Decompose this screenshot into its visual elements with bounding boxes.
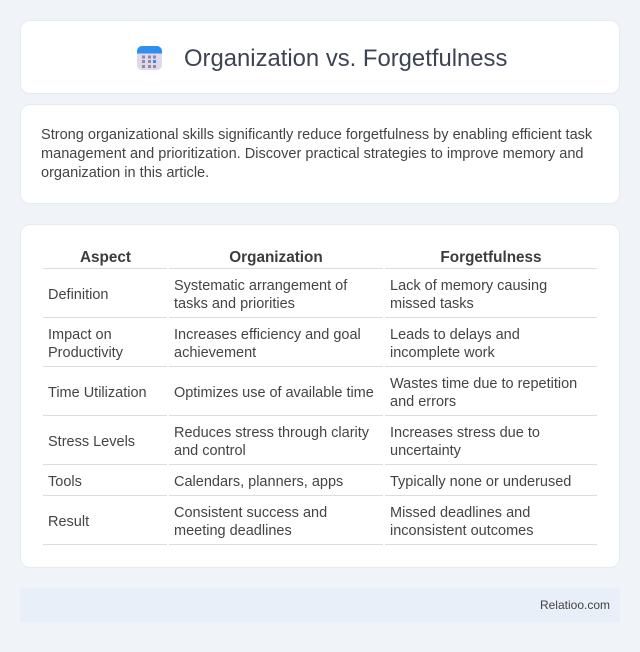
table row: Impact on Productivity xyxy=(48,327,520,361)
table row: Definition xyxy=(48,278,547,312)
table row: Result: Consistent success and xyxy=(174,505,327,521)
table row: Time Utilization: Time Utilization xyxy=(48,385,147,401)
table row: Stress Levels: Increases stress due to xyxy=(390,425,540,441)
table row: Time Utilization: and errors xyxy=(390,394,456,410)
table row: Stress Levels: Reduces stress through clarity xyxy=(174,425,369,441)
text block: introduction xyxy=(41,127,592,181)
table row: Definition: Lack of memory causing xyxy=(390,278,547,294)
icon: calendar xyxy=(137,46,162,70)
table row: Impact on Productivity: Productivity xyxy=(48,345,123,361)
panel: introduction card xyxy=(20,104,620,204)
table row: Impact on Productivity: incomplete work xyxy=(390,345,495,361)
table row: Tools: Typically none or underused xyxy=(390,474,571,490)
table row: Result xyxy=(48,505,533,539)
table row: Impact on Productivity: Impact on xyxy=(48,327,112,343)
table row: Definition: Definition xyxy=(48,287,108,303)
table row: Result: Missed deadlines and xyxy=(390,505,530,521)
text block: introduction: Strong organizational skills significantly reduce forgetfulness by enabling efficient task xyxy=(41,127,592,143)
text block: introduction: management and prioritization. Discover practical strategies to improve memory and xyxy=(41,146,584,162)
table row: Impact on Productivity: Leads to delays and xyxy=(390,327,520,343)
table row: Impact on Productivity: Increases efficiency and goal xyxy=(174,327,361,343)
table row: Stress Levels: and control xyxy=(174,443,246,459)
table row: Tools: Calendars, planners, apps xyxy=(174,474,343,490)
panel: comparison table card xyxy=(20,224,620,568)
table row: Tools xyxy=(48,474,571,490)
table row: Stress Levels: Stress Levels xyxy=(48,434,135,450)
table row: Definition: Systematic arrangement of xyxy=(174,278,347,294)
heading: Forgetfulness column: Forgetfulness xyxy=(440,249,542,266)
table row: Time Utilization: Optimizes use of available time xyxy=(174,385,374,401)
panel: header card xyxy=(20,20,620,94)
table row: Result: inconsistent outcomes xyxy=(390,523,533,539)
table row: Definition: tasks and priorities xyxy=(174,296,295,312)
footer bar xyxy=(20,588,620,622)
heading: Organization column: Organization xyxy=(229,249,323,266)
text block: introduction: organization in this article. xyxy=(41,165,209,181)
title: Organization vs. Forgetfulness xyxy=(184,45,507,72)
table row: Time Utilization: Wastes time due to repetition xyxy=(390,376,577,392)
table row: Result: Result xyxy=(48,514,89,530)
heading: Aspect column: Aspect xyxy=(80,249,131,266)
table row: Definition: missed tasks xyxy=(390,296,474,312)
table row: Impact on Productivity: achievement xyxy=(174,345,256,361)
table row: Tools: Tools xyxy=(48,474,82,490)
footer text: Relatioo.com xyxy=(540,598,610,612)
table row: Result: meeting deadlines xyxy=(174,523,292,539)
table row: Stress Levels: uncertainty xyxy=(390,443,461,459)
table row: Time Utilization xyxy=(48,376,577,410)
table row: Stress Levels xyxy=(48,425,540,459)
